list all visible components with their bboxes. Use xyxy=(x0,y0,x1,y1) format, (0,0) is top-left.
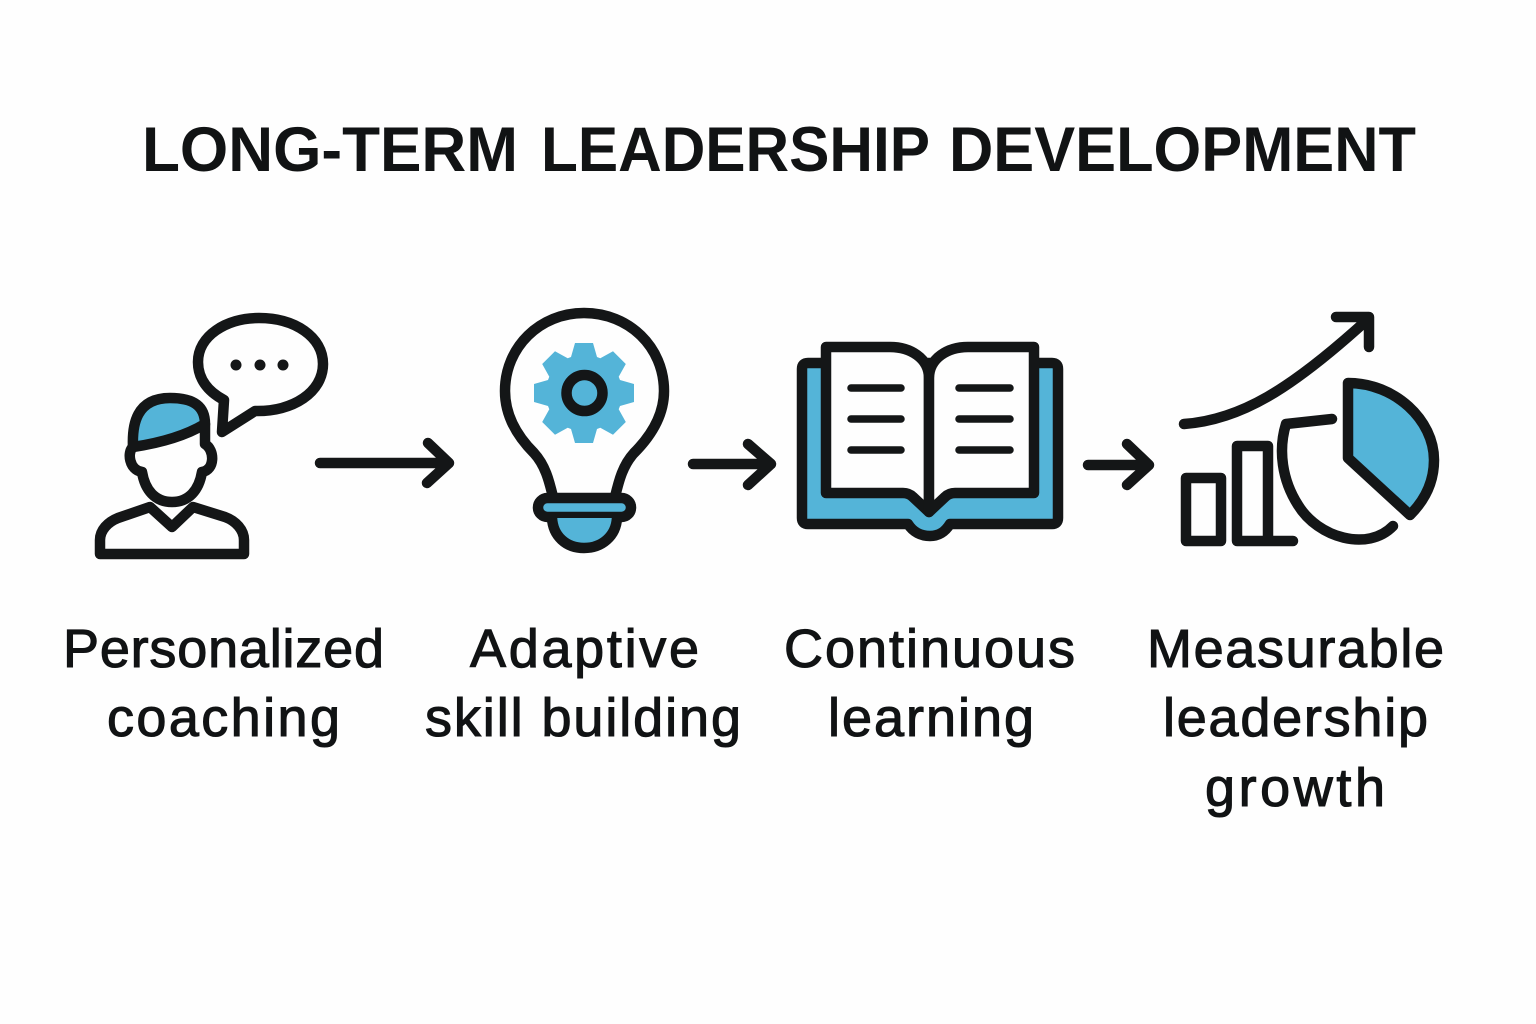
label: personalized coaching: Personalized xyxy=(63,619,384,679)
label: continuous learning: learning xyxy=(828,688,1034,748)
right page xyxy=(929,347,1034,512)
label: adaptive skill building xyxy=(425,619,741,748)
label: measurable leadership growth: leadership xyxy=(1163,688,1428,748)
book cover xyxy=(802,363,1058,536)
title: DEVELOPMENT xyxy=(949,115,1416,185)
title: LONG-TERM xyxy=(142,115,518,185)
left page xyxy=(826,347,929,512)
label: adaptive skill building: Adaptive xyxy=(470,619,699,679)
bar tall xyxy=(1237,446,1293,541)
label: measurable leadership growth xyxy=(1147,619,1444,818)
step labels xyxy=(63,619,1444,818)
label: continuous learning xyxy=(784,619,1075,748)
icon: growth chart xyxy=(1184,317,1434,541)
icon: person with speech bubble xyxy=(100,318,323,554)
growth arrow xyxy=(1184,317,1369,424)
bulb collar xyxy=(538,498,631,517)
gear hub xyxy=(566,375,602,411)
label: adaptive skill building: skill building xyxy=(425,688,741,748)
bulb base xyxy=(552,518,617,548)
hair xyxy=(133,398,205,447)
label: measurable leadership growth: Measurable xyxy=(1147,619,1444,679)
head and ears xyxy=(130,424,212,502)
gear xyxy=(534,343,634,443)
icon: light bulb with gear xyxy=(505,313,664,548)
shoulders xyxy=(100,507,244,554)
arrow 2 xyxy=(693,444,771,485)
arrow 3 xyxy=(1088,444,1149,485)
speech bubble xyxy=(198,318,323,432)
speech bubble dots xyxy=(230,360,288,370)
bar small xyxy=(1186,478,1221,541)
arrow 1 xyxy=(320,443,449,483)
title: LEADERSHIP xyxy=(541,115,930,185)
label: continuous learning: Continuous xyxy=(784,619,1075,679)
pie slice xyxy=(1348,383,1434,515)
text lines xyxy=(851,388,1010,450)
label: personalized coaching: coaching xyxy=(107,688,340,748)
bulb outline xyxy=(505,313,664,497)
pie outline xyxy=(1282,419,1393,540)
label: personalized coaching xyxy=(63,619,384,748)
label: measurable leadership growth: growth xyxy=(1205,758,1385,818)
icon: open book xyxy=(802,347,1058,536)
title xyxy=(142,115,1416,185)
